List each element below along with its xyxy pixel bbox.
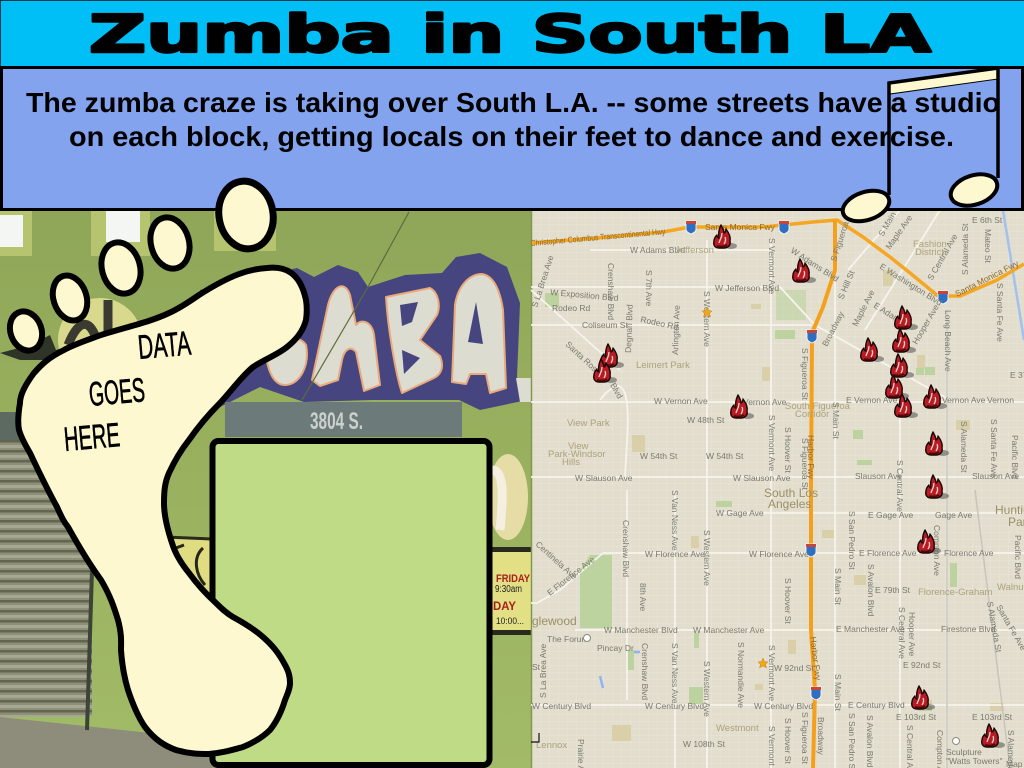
map labels vertical: S Hill St (836, 268, 857, 301)
footprint graphic (5, 177, 307, 754)
map labels horizontal (530, 215, 1024, 768)
map stars (702, 307, 768, 668)
title banner (0, 0, 1024, 66)
small blue lakes (600, 652, 640, 688)
foot text: goes: GOES (87, 371, 146, 414)
map labels horizontal: View (568, 441, 589, 452)
map labels horizontal: "Watts Towers" (946, 756, 1003, 766)
map labels horizontal: Park-Windsor (548, 449, 606, 460)
map labels horizontal: South Los (764, 486, 818, 500)
map labels horizontal: W Manchester Blvd (604, 625, 678, 635)
intro text line 2: on each block, getting locals on their feet to dance and exercise. (69, 121, 954, 152)
map labels vertical: S Hoover St (783, 578, 793, 624)
address sign (225, 402, 462, 437)
map labels horizontal: Coliseum St (582, 320, 628, 330)
map labels vertical: Long Beach Ave (943, 310, 953, 372)
map labels horizontal: Santa Monica Fwy (705, 222, 776, 232)
map labels vertical: Hooper Ave (907, 612, 917, 657)
map labels vertical: S Alameda St (959, 421, 969, 473)
map labels horizontal: District (915, 247, 944, 258)
map labels horizontal: E Gage Ave (868, 510, 913, 520)
big toe (214, 177, 278, 253)
map labels vertical: Maple Ave (883, 213, 914, 251)
second toe (145, 213, 195, 273)
map labels horizontal: glewood (532, 614, 577, 628)
map labels horizontal: Angeles (768, 497, 811, 511)
map labels vertical: S Hoover St (783, 718, 793, 764)
map labels horizontal: E Manchester Ave (836, 624, 905, 634)
map labels vertical: Crenshaw Blvd (621, 520, 631, 577)
foot sole (18, 268, 307, 754)
map labels horizontal: W 54th St (640, 451, 678, 461)
map labels vertical: S Vermont Ave (767, 238, 777, 294)
freeway I-110 (811, 220, 835, 768)
map labels vertical: S Alameda St (960, 223, 970, 275)
map labels horizontal: Vernon Ave (743, 397, 787, 407)
rail corridor (947, 310, 1010, 768)
map labels horizontal: W Florence Ave (645, 549, 705, 559)
map labels vertical: Pacific Blvd (1010, 435, 1020, 479)
map labels vertical: Crenshaw Blvd (640, 643, 650, 700)
schedule flyer: 9:30am (495, 584, 522, 595)
title: Zumba in South LA (89, 5, 931, 65)
map labels vertical: Mateo St (983, 229, 993, 264)
map labels vertical: S Van Ness Ave (670, 643, 680, 704)
map labels horizontal: E 6th St (972, 215, 1003, 225)
map labels horizontal: Centinela Ave (534, 539, 579, 582)
map labels vertical: S Central Ave (895, 460, 905, 512)
map labels vertical: S Avalon Blvd (866, 564, 876, 617)
map labels horizontal: Santa Monica Fwy (953, 258, 1021, 299)
map labels horizontal: W Century Blvd (532, 701, 591, 711)
map corner mark (531, 733, 539, 742)
map labels horizontal: Slauson Ave (972, 471, 1019, 481)
map labels horizontal: Rodeo Rd (640, 314, 679, 332)
map labels horizontal: Florence-Graham (918, 587, 993, 598)
map labels horizontal: Santa Rosalia (564, 339, 609, 383)
map labels vertical: Compton Ave (932, 525, 942, 576)
map labels vertical: Degnan Blvd (623, 304, 635, 353)
map labels vertical: S Figueroa St (800, 438, 810, 491)
map labels horizontal: South Figueroa (785, 401, 851, 412)
map labels vertical: S 7th Ave (644, 270, 654, 307)
map of South LA (529, 201, 1024, 768)
white R letter (516, 378, 531, 402)
map labels horizontal: Florence Ave (944, 548, 994, 558)
map labels horizontal: Hills (562, 457, 580, 468)
map labels vertical: Hooper Ave (910, 302, 941, 346)
map labels vertical: S Main St (833, 674, 843, 711)
map labels vertical: S Western Ave (702, 661, 712, 717)
map labels vertical: S Hoover St (783, 427, 793, 473)
map labels horizontal: W Adams Blvd (630, 245, 686, 255)
map labels vertical: S San Pedro St (847, 511, 857, 570)
right note head (947, 169, 1001, 211)
left note head (839, 185, 893, 227)
schedule flyer: FRIDAY (496, 573, 531, 585)
map labels vertical: Broadway (816, 717, 826, 756)
map labels vertical: S Figueroa St (800, 712, 810, 765)
schedule flyer (492, 547, 532, 635)
map labels vertical: S Western Ave (702, 530, 712, 586)
map labels horizontal: E Florence Ave (859, 548, 917, 558)
map labels horizontal: E 79th St (875, 585, 911, 595)
map labels vertical: S Avalon Blvd (865, 715, 875, 768)
map labels horizontal: Christopher Columbus Transcontinental Hwy (530, 226, 666, 248)
dark band (0, 412, 30, 440)
small toe (5, 307, 47, 355)
map labels horizontal: W Century Blvd (645, 701, 704, 711)
map labels horizontal: E 103rd St (896, 712, 937, 722)
map parks (545, 290, 957, 711)
map labels vertical: Arlington Ave (670, 305, 682, 355)
map labels horizontal: E Century Blvd (848, 700, 905, 710)
river (1003, 210, 1024, 340)
foot text: data: DATA (136, 324, 193, 367)
map labels vertical: S Vermont Ave (767, 415, 777, 471)
map labels horizontal: W Adams Blvd (789, 245, 841, 284)
foot text: here: HERE (62, 416, 121, 459)
painted character circle (488, 454, 528, 540)
map labels horizontal: W 48th St (687, 415, 725, 425)
map labels vertical: S La Brea Ave (529, 254, 556, 309)
map labels vertical: Broadway (820, 309, 846, 348)
map labels vertical: S La Brea Ave (538, 644, 548, 698)
map labels horizontal: Vernon (987, 395, 1014, 405)
map labels horizontal: E Washington Blvd (878, 261, 944, 308)
fourth toe (47, 271, 93, 325)
map labels horizontal: Lennox (536, 740, 567, 751)
intro line 1: The zumba craze is taking over South L.A. -- some streets have a studio (26, 87, 1000, 118)
wall mascot circle (0, 298, 142, 382)
map labels vertical: S Central Ave (897, 607, 907, 659)
map labels vertical: S Santa Fe Ave (995, 283, 1005, 342)
map labels horizontal: W Slauson Ave (733, 473, 791, 483)
map labels horizontal: W Exposition Blvd (550, 287, 619, 303)
map labels horizontal: W Jefferson Blvd (715, 283, 779, 293)
map labels vertical: Crenshaw Blvd (606, 263, 616, 320)
map labels horizontal: Slauson Ave (855, 471, 902, 481)
map labels horizontal: Pincay Dr (597, 643, 634, 653)
map labels horizontal: Firestone Blvd (941, 624, 996, 634)
map labels vertical: S Santa Fe Ave (989, 419, 999, 478)
graffiti logo outline (200, 253, 527, 410)
background photo: zumba studio wall (0, 210, 532, 768)
map labels horizontal: E 103rd St (972, 712, 1013, 722)
map labels horizontal: W Slauson Ave (575, 473, 633, 483)
map labels horizontal: The Forum (547, 634, 589, 644)
window frames (0, 210, 276, 256)
address sign: 3804 S. (310, 408, 363, 435)
map labels horizontal: W 108th St (683, 739, 726, 749)
map labels horizontal: W Florence Ave (749, 549, 809, 559)
third toe (96, 238, 146, 298)
map labels vertical: S Normandie Ave (736, 642, 746, 708)
graffiti letters (265, 274, 506, 393)
map labels horizontal: View Park (567, 418, 610, 429)
map labels horizontal: W Vernon Ave (654, 396, 708, 406)
map labels horizontal: W Manchester Ave (693, 625, 764, 635)
map labels vertical: S Alameda St (985, 601, 1004, 654)
map labels horizontal: Corridor (795, 409, 829, 420)
map labels vertical: S Van Ness Ave (670, 490, 680, 551)
map labels horizontal: Fashion (913, 239, 947, 250)
map labels horizontal: Gage Ave (935, 510, 972, 520)
map labels horizontal: Rodeo Rd (552, 303, 591, 313)
map labels horizontal: W 54th St (706, 451, 744, 461)
map labels vertical: 8th Ave (638, 583, 648, 611)
map labels horizontal: W 92nd St (774, 663, 814, 673)
ground (0, 717, 300, 768)
note stems (889, 68, 998, 195)
freeway I-10 (531, 220, 1024, 296)
map labels horizontal: E Vernon Ave (846, 395, 898, 405)
music note icon (839, 68, 1001, 227)
map labels vertical: S Central Ave (925, 232, 960, 282)
map labels horizontal: St (532, 662, 541, 672)
Forum and Watts Towers markers (584, 634, 960, 744)
map labels horizontal: Westmont (716, 723, 759, 734)
map labels vertical: Maple Ave (850, 288, 877, 328)
map labels vertical: Pacific Blvd (1013, 535, 1023, 579)
map land blocks (612, 270, 1004, 741)
map labels horizontal: Sculpture (946, 747, 982, 757)
note beam (890, 69, 998, 94)
map labels horizontal: W Gage Ave (716, 508, 764, 518)
map labels horizontal: Vernon Ave (942, 395, 986, 405)
map labels horizontal: E Florence Ave (545, 554, 597, 598)
highway shields (686, 221, 948, 700)
map labels horizontal: Jefferson (675, 245, 714, 256)
metal shutter (0, 440, 92, 717)
map labels vertical: S Main St (831, 402, 841, 439)
map roads (531, 210, 1024, 768)
schedule flyer: 10:00... (496, 616, 524, 626)
map labels vertical: S Main St (876, 201, 903, 238)
intro text panel (2, 68, 1022, 210)
map labels vertical (529, 201, 1024, 768)
map labels vertical: S Vermont Ave (767, 645, 777, 701)
green data box (212, 441, 490, 765)
map labels vertical: S Main St (833, 568, 843, 605)
map labels vertical: Harbor Fwy (808, 636, 823, 682)
shutter frame (87, 570, 92, 730)
map labels vertical: Harbor Fwy (806, 435, 816, 480)
map labels horizontal: Blvd (608, 381, 625, 401)
map labels vertical: S Figueroa St (800, 348, 810, 401)
left banner (165, 537, 212, 600)
map labels vertical: S Figueroa St (828, 209, 854, 263)
wall cable (302, 212, 409, 400)
map labels horizontal: Leimert Park (636, 360, 690, 371)
studio marker flames (594, 225, 1005, 748)
map labels horizontal: W Century Blvd (754, 701, 813, 711)
map labels vertical: S Western Ave (702, 291, 712, 347)
map labels horizontal: E Adams (872, 300, 906, 327)
graffiti letter counters (400, 302, 483, 374)
map labels horizontal: E 92nd St (903, 660, 941, 670)
schedule flyer: DAY (493, 599, 516, 613)
